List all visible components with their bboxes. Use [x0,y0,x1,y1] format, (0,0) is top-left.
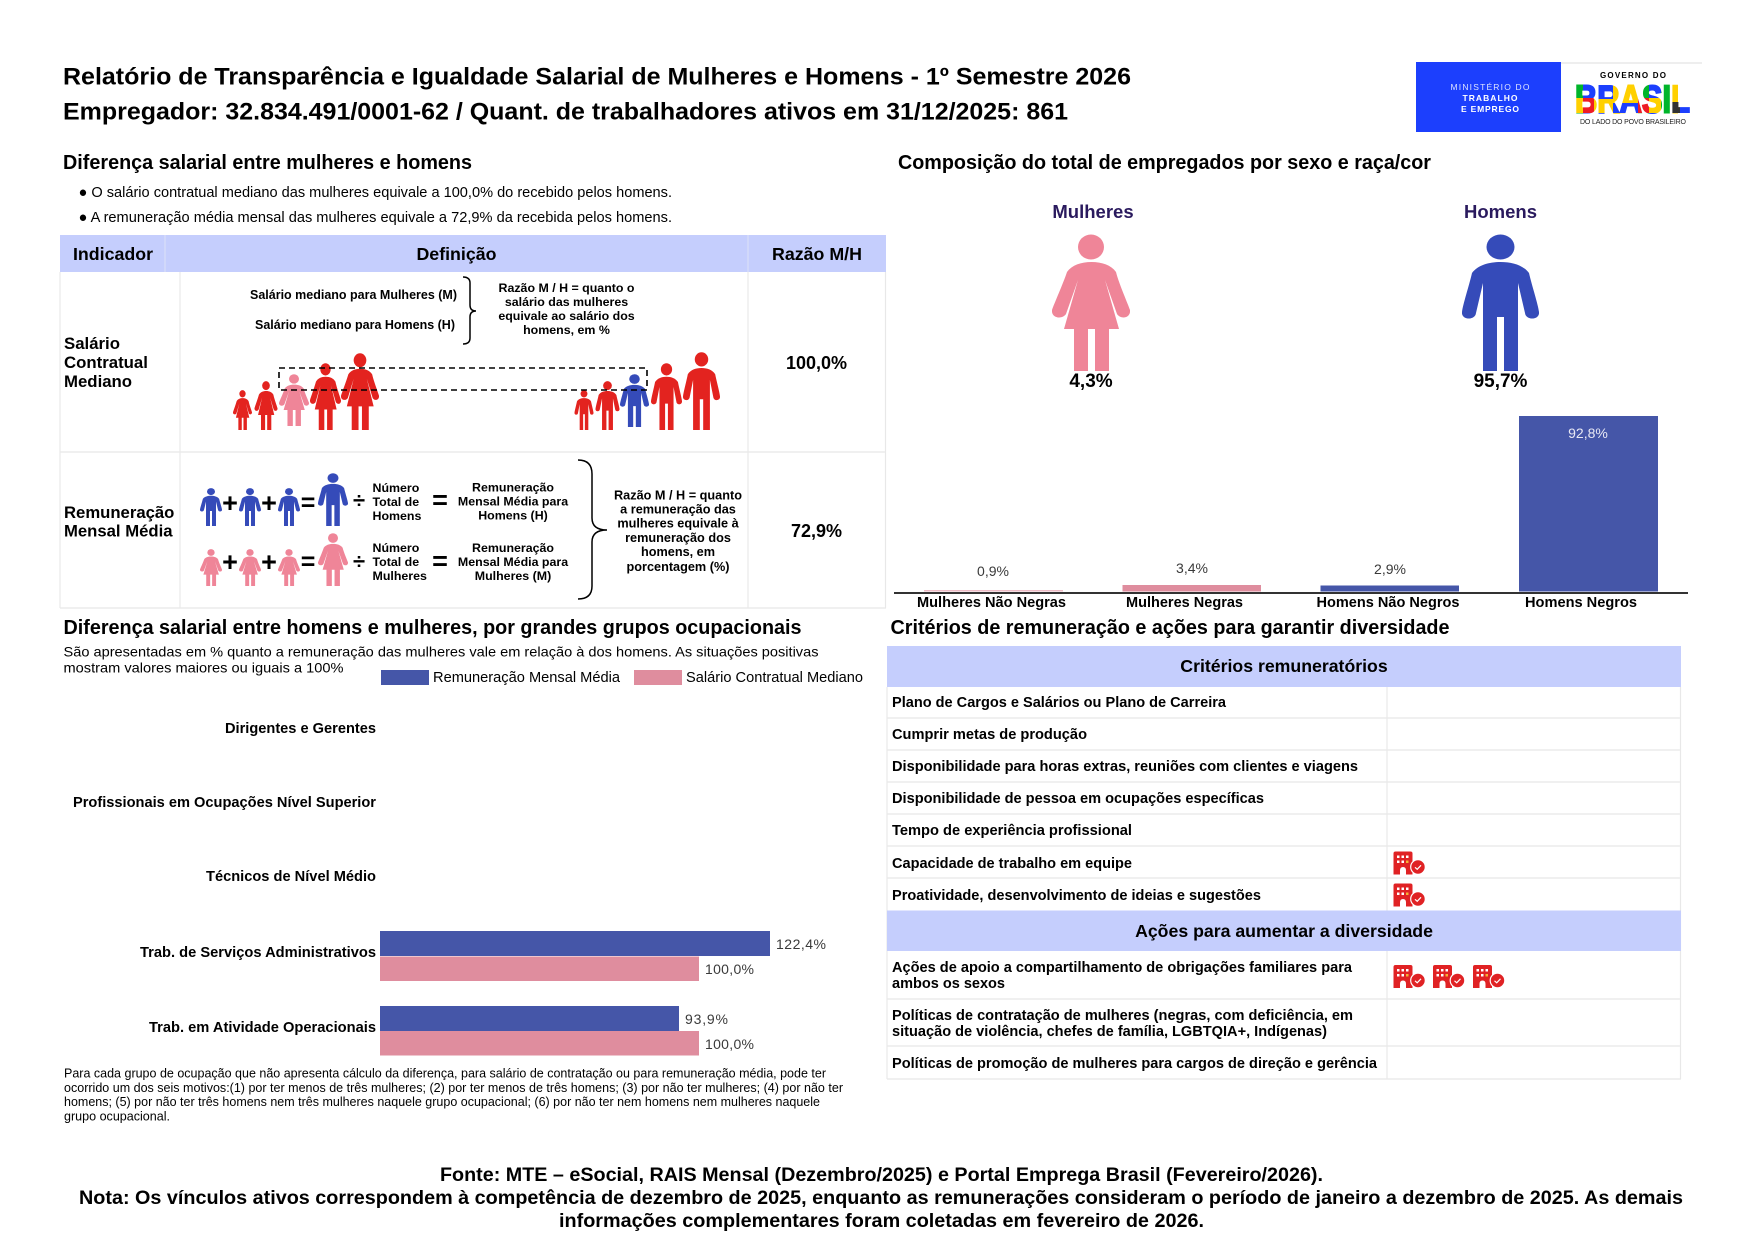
description [64,644,818,676]
header: ações para aumentar a diversidade [887,910,1681,951]
definition: razão M/H: porcentagem (%) [627,560,729,574]
summary bullets: ● A remuneração média mensal das mulheres equivale a 72,9% da recebida pelos homens. [78,209,672,226]
value: 72,9%: 72,9% [791,521,842,541]
formula: men: Total de [372,495,419,509]
criteria rows: Capacidade de trabalho em equipe [892,856,1132,872]
bar chart: trab. de serviços administrativos [380,931,826,981]
occupational group labels: Técnicos de Nível Médio [206,868,376,885]
bar chart: sexo e raça/cor: Homens Negros [1525,595,1637,611]
footnote: ocorrido um dos seis motivos:(1) por ter menos de três mulheres; (2) por ter menos de três homens; (3) por não ter mulheres; (4) por não ter [64,1080,844,1095]
formula: women: ÷ [353,549,365,574]
women share [1052,201,1134,392]
occupational group labels: Trab. em Atividade Operacionais [149,1019,376,1036]
bar chart: sexo e raça/cor: 2,9% [1374,561,1406,577]
definition: razão M/H: a remuneração das [620,502,736,516]
bar chart: trab. de serviços administrativos: 122,4% [776,936,826,952]
title: Relatório de Transparência e Igualdade Salarial de Mulheres e Homens - 1º Semestre 2026 [63,64,1131,90]
icons: company marks [1394,965,1505,988]
summary bullets [78,184,672,226]
bar chart: sexo e raça/cor: 0,9% [977,563,1009,579]
actions rows: Políticas de promoção de mulheres para cargos de direção e gerência [892,1056,1378,1072]
bar chart: sexo e raça/cor: Mulheres Negras [1126,595,1243,611]
formula: men: = [301,489,315,517]
men share [1462,201,1539,392]
formula: men: Homens [372,509,421,523]
formula: women: = [432,546,448,576]
formula: men: + [222,488,238,518]
formula: women: Total de [372,555,419,569]
panel: diferença salarial por grupos ocupacionais [64,617,863,1124]
header: critérios remuneratórios [887,646,1681,687]
row label: Mediano [64,372,132,391]
definition: razão M/H: Razão M / H = quanto o [499,281,635,295]
bar chart: sexo e raça/cor: Mulheres Não Negras [917,595,1066,611]
formula: men: Mensal Média para [458,494,568,508]
definition labels: Salário mediano para Mulheres (M) [250,287,457,302]
actions rows: situação de violência, chefes de família, LGBTQIA+, Indígenas) [892,1024,1327,1040]
definition: razão M/H: homens, em [641,545,715,559]
footnote: homens; (5) por não ter três homens nem três mulheres naquele grupo ocupacional; (6) por não ter nem homens nem mulheres naquele [64,1094,820,1109]
occupational group labels [73,720,376,1036]
icons: company marks [1394,852,1425,906]
figures: men by salary order [574,352,720,430]
formula: men: Remuneração [472,480,554,494]
bar chart: trab. em atividade operacionais: 93,9% [685,1011,728,1027]
formula: men: ÷ [353,488,365,513]
title [63,64,1131,126]
panel: diferença salarial entre mulheres e homens [60,152,886,608]
women share: Mulheres [1052,201,1134,222]
criteria rows: Proatividade, desenvolvimento de ideias e sugestões [892,888,1261,904]
brace [578,460,607,599]
formula: women: + [261,547,277,577]
logo: Ministério do Trabalho e Emprego / Governo do Brasil: MINISTÉRIO DO [1450,82,1530,92]
description: mostram valores maiores ou iguais a 100% [64,660,344,676]
legend: Remuneração Mensal Média [433,670,621,686]
legend: Salário Contratual Mediano [686,670,863,686]
bar chart: sexo e raça/cor: 3,4% [1176,560,1208,576]
legend [381,670,863,686]
logo: Ministério do Trabalho e Emprego / Governo do Brasil: E EMPREGO [1461,104,1519,114]
actions rows [892,960,1378,1072]
criteria rows: Plano de Cargos e Salários ou Plano de Carreira [892,695,1227,711]
summary bullets: ● O salário contratual mediano das mulheres equivale a 100,0% do recebido pelos homens. [78,184,672,201]
criteria rows: Cumprir metas de produção [892,727,1087,743]
logo: Ministério do Trabalho e Emprego / Governo do Brasil: DO LADO DO POVO BRASILEIRO [1580,119,1687,126]
table grid [60,272,886,608]
men share: 95,7% [1474,371,1528,392]
footnote: Para cada grupo de ocupação que não apresenta cálculo da diferença, para salário de contratação ou para remuneração média, pode ter [64,1066,827,1080]
bar chart: trab. em atividade operacionais [380,1006,754,1056]
table grid [887,687,1681,1079]
row label: Mensal Média [64,522,173,540]
formula: women: + [222,547,238,577]
bar chart: sexo e raça/cor: 92,8% [1568,425,1608,441]
men share: Homens [1464,201,1537,222]
formula: men: = [432,485,448,515]
panel: critérios de remuneração e ações [887,617,1681,1079]
title: Empregador: 32.834.491/0001-62 / Quant. de trabalhadores ativos em 31/12/2025: 861 [63,98,1068,126]
figures: women by salary order [233,353,379,430]
occupational group labels: Dirigentes e Gerentes [225,720,376,737]
formula: men [200,473,568,526]
footer: fonte e nota: Nota: Os vínculos ativos correspondem à competência de dezembro de 2025, enquanto as remunerações consideram o período de janeiro a dezembro de 2025. As demais [79,1188,1683,1209]
formula: men: Homens (H) [478,508,548,522]
footer: fonte e nota [79,1165,1683,1232]
criteria rows: Disponibilidade para horas extras, reuniões com clientes e viagens [892,759,1358,775]
table header: Razão M/H [772,244,862,264]
formula: women: = [301,548,315,576]
logo: Ministério do Trabalho e Emprego / Governo do Brasil: GOVERNO DO [1600,71,1666,80]
value: 100,0%: 100,0% [786,353,847,373]
logo: Ministério do Trabalho e Emprego / Governo do Brasil [1416,62,1702,132]
definition: razão M/H: Razão M / H = quanto [614,488,742,502]
formula: men: + [261,488,277,518]
description: São apresentadas em % quanto a remuneração das mulheres vale em relação à dos homens. As situações positivas [64,644,818,660]
row: salário contratual mediano [64,277,847,430]
row label: Salário [64,334,120,353]
definition: razão M/H: equivale ao salário dos [498,309,635,323]
row label: Remuneração [64,503,174,522]
definition labels [250,287,457,332]
definition labels: Salário mediano para Homens (H) [255,317,455,332]
formula: women: Mulheres (M) [475,569,551,583]
formula: women: Remuneração [472,541,554,555]
definition: razão M/H: remuneração dos [625,531,731,545]
row label: Contratual [64,353,148,372]
footnote [64,1066,844,1124]
header: ações para aumentar a diversidade: Ações para aumentar a diversidade [1135,921,1433,941]
bar chart: trab. de serviços administrativos: 100,0% [705,961,754,977]
header: critérios remuneratórios: Critérios remuneratórios [1180,656,1388,676]
definition: razão M/H: mulheres equivale à [617,516,740,530]
heading: grupos ocupacionais: Diferença salarial entre homens e mulheres, por grandes grupos ocupacionais [64,617,802,639]
definition: razão M/H: homens, em % [523,323,610,337]
panel: composição do total de empregados [894,152,1688,611]
footer: fonte e nota: informações complementares foram coletadas em fevereiro de 2026. [559,1211,1204,1232]
table header [60,235,886,272]
logo: Ministério do Trabalho e Emprego / Governo do Brasil: TRABALHO [1462,93,1518,103]
formula: men: Número [372,481,420,495]
heading: composição: Composição do total de empregados por sexo e raça/cor [898,152,1431,174]
actions rows: Ações de apoio a compartilhamento de obrigações familiares para [892,960,1353,976]
formula: women [200,533,568,586]
criteria rows: Tempo de experiência profissional [892,823,1132,839]
formula: women: Mulheres [372,569,427,583]
occupational group labels: Profissionais em Ocupações Nível Superior [73,794,376,811]
actions rows: ambos os sexos [892,976,1005,992]
footer: fonte e nota: Fonte: MTE – eSocial, RAIS Mensal (Dezembro/2025) e Portal Emprega Brasil (Fevereiro/2026). [440,1165,1323,1186]
row: remuneração mensal média [64,460,842,599]
criteria rows: Disponibilidade de pessoa em ocupações específicas [892,791,1264,807]
brace [463,277,476,344]
heading: diferença salarial: Diferença salarial entre mulheres e homens [63,152,472,174]
table header: Indicador [73,244,153,264]
criteria rows [892,695,1358,904]
footnote: grupo ocupacional. [64,1108,170,1124]
women share: 4,3% [1069,371,1113,392]
dashed median box [279,368,647,390]
formula: women: Número [372,541,420,555]
actions rows: Políticas de contratação de mulheres (negras, com deficiência, em [892,1008,1353,1024]
bar chart: sexo e raça/cor: Homens Não Negros [1316,595,1460,611]
definition: razão M/H: salário das mulheres [505,295,628,309]
table header: Definição [416,244,497,264]
occupational group labels: Trab. de Serviços Administrativos [140,944,376,961]
heading: critérios: Critérios de remuneração e ações para garantir diversidade [890,617,1450,639]
bar chart: sexo e raça/cor [894,416,1688,611]
logo: Ministério do Trabalho e Emprego / Governo do Brasil: BRASIL [1575,78,1690,122]
bar chart: trab. em atividade operacionais: 100,0% [705,1036,754,1052]
formula: women: Mensal Média para [458,555,568,569]
